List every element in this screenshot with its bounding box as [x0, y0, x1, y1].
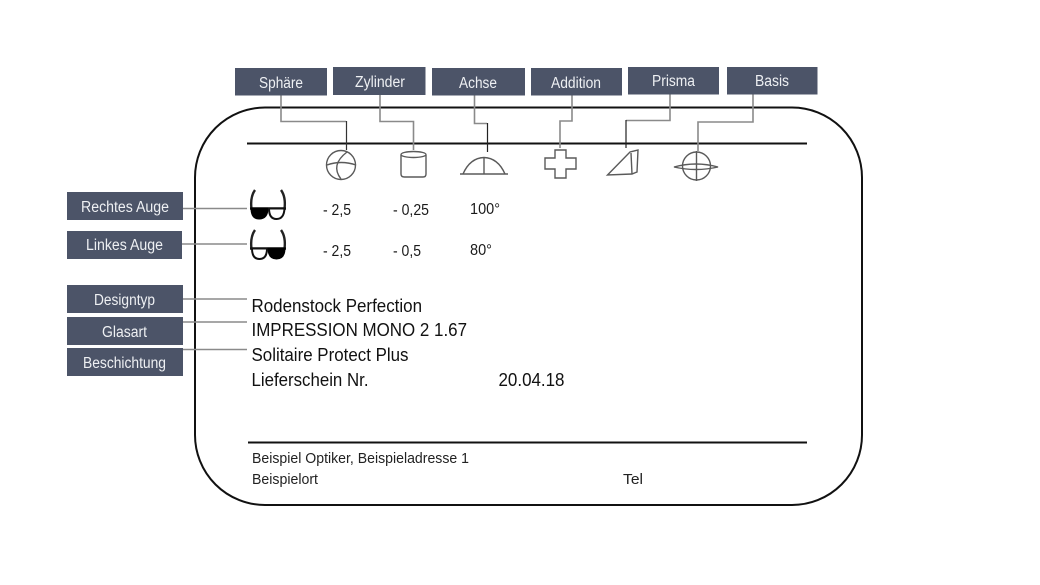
label: Zylinder: Zylinder	[355, 74, 405, 91]
values: right eye: - 2,5	[323, 202, 351, 219]
label: Prisma	[628, 67, 719, 94]
label: Achse	[432, 68, 525, 96]
icon: axis	[460, 158, 508, 174]
text: coating: Solitaire Protect Plus	[252, 345, 408, 365]
text: optician address: Beispiel Optiker, Beispieladresse 1	[252, 450, 469, 467]
connector: Rechtes Auge	[183, 208, 247, 210]
icon: prism	[608, 150, 638, 175]
label: Glasart	[67, 317, 183, 345]
connector: Beschichtung	[183, 348, 247, 350]
values: left eye	[323, 242, 492, 260]
values: right eye	[323, 201, 500, 219]
bottom rule	[248, 442, 807, 444]
top rule	[247, 142, 807, 144]
icon: addition cross	[545, 150, 576, 178]
connector: Sphäre	[281, 95, 346, 150]
values: left eye: 80°	[470, 242, 492, 259]
label: Sphäre	[235, 68, 327, 96]
label: Achse: Achse	[459, 75, 497, 92]
label: Rechtes Auge: Rechtes Auge	[81, 199, 169, 216]
panel: card outline	[195, 108, 862, 505]
label: Zylinder	[333, 67, 426, 95]
label: Linkes Auge	[67, 231, 182, 259]
label: Basis	[727, 67, 818, 94]
label: Sphäre: Sphäre	[259, 75, 303, 92]
label: Addition: Addition	[551, 75, 601, 92]
icon: base	[674, 151, 718, 181]
connector: Basis	[698, 94, 753, 151]
label: Linkes Auge: Linkes Auge	[86, 237, 163, 254]
icon: sphere	[326, 150, 356, 180]
label: Basis: Basis	[755, 73, 789, 90]
icon: glasses right eye dark	[250, 190, 286, 219]
label: Designtyp: Designtyp	[94, 292, 155, 309]
values: left eye: - 2,5	[323, 243, 351, 260]
connector: Prisma	[626, 94, 670, 148]
connector: Zylinder	[380, 95, 414, 150]
icon: glasses left eye dark	[250, 230, 286, 259]
connector: Designtyp	[183, 298, 247, 300]
connector: Achse	[474, 95, 488, 152]
values: right eye: - 0,25	[393, 202, 429, 219]
text: design type: Rodenstock Perfection	[252, 296, 422, 316]
text: date: 20.04.18	[498, 370, 564, 390]
label: Designtyp	[67, 285, 183, 313]
label: Beschichtung	[67, 348, 183, 376]
icon: cylinder	[401, 152, 426, 177]
text: lens type: IMPRESSION MONO 2 1.67	[252, 320, 467, 340]
text: delivery note: Lieferschein Nr.	[252, 370, 368, 390]
connector: Linkes Auge	[182, 243, 247, 245]
label: Prisma: Prisma	[652, 73, 695, 90]
label: Glasart: Glasart	[102, 324, 148, 341]
text: town: Beispielort	[252, 471, 319, 488]
connector: Glasart	[183, 321, 247, 323]
values: right eye: 100°	[470, 201, 500, 218]
text: phone: Tel	[623, 471, 643, 488]
values: left eye: - 0,5	[393, 243, 421, 260]
label: Rechtes Auge	[67, 192, 183, 220]
label: Beschichtung: Beschichtung	[83, 355, 166, 372]
label: Addition	[531, 68, 622, 96]
connector: Addition	[560, 95, 572, 148]
